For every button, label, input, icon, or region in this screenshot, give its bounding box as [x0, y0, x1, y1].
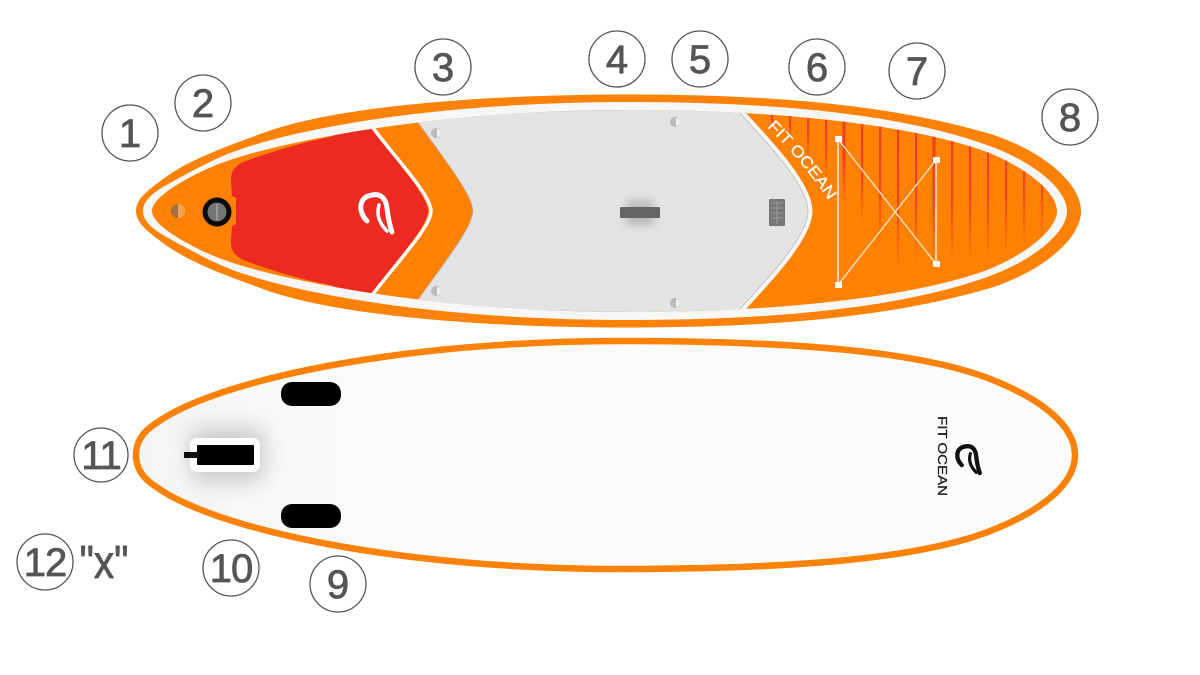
number 12 with x note [17, 534, 128, 590]
side fin bottom [281, 504, 341, 528]
tail D-ring [164, 196, 194, 226]
inflation valve [202, 198, 232, 226]
top board: deck view [136, 94, 1081, 328]
carry handle [620, 201, 660, 225]
traction stripes [771, 114, 1044, 262]
hull body with orange rim [136, 341, 1075, 569]
deck contents clipped to inner outline [152, 110, 1057, 312]
number 7: 7 [906, 50, 928, 94]
red tail pad white stripe [370, 124, 431, 298]
number 1: 1 [119, 112, 141, 156]
hull brand text: FIT OCEAN [935, 416, 950, 496]
number 3 [415, 39, 471, 95]
D-rings on deck [431, 117, 680, 308]
number 8 [1042, 89, 1098, 145]
brand text on nose: FIT OCEAN [768, 120, 837, 200]
number 2: 2 [192, 82, 214, 126]
number 10: 10 [210, 547, 252, 591]
hull logo mark [957, 446, 980, 473]
number 4 [589, 31, 645, 87]
side fin top [281, 382, 341, 406]
board outer orange rim [136, 94, 1081, 328]
number 4: 4 [606, 38, 628, 82]
number 10 [203, 540, 259, 596]
deck white border [730, 102, 808, 320]
center fin box [184, 438, 260, 472]
board white band [143, 102, 1067, 320]
number 11: 11 [81, 434, 121, 478]
number 12 with x note: 12 [24, 541, 66, 585]
bungee cargo lines [835, 136, 940, 288]
number 3: 3 [432, 46, 454, 90]
number 6: 6 [806, 46, 828, 90]
bottom board: hull view [136, 341, 1075, 569]
number 9: 9 [327, 563, 349, 607]
grey deck pad [415, 109, 808, 313]
number 1 [102, 105, 158, 161]
inner orange field [152, 110, 1057, 312]
number 6 [789, 39, 845, 95]
number 9 [310, 556, 366, 612]
number 12 with x note: "x" [80, 536, 128, 588]
number 7 [889, 43, 945, 99]
number 2 [175, 75, 231, 131]
number 5 [672, 31, 728, 87]
number 5: 5 [689, 38, 711, 82]
red tail pad [231, 124, 428, 298]
number 8: 8 [1059, 96, 1081, 140]
number 11 [74, 428, 128, 482]
fin box shadow [190, 428, 265, 482]
spec label [769, 199, 785, 226]
tail logo mark [361, 195, 392, 232]
